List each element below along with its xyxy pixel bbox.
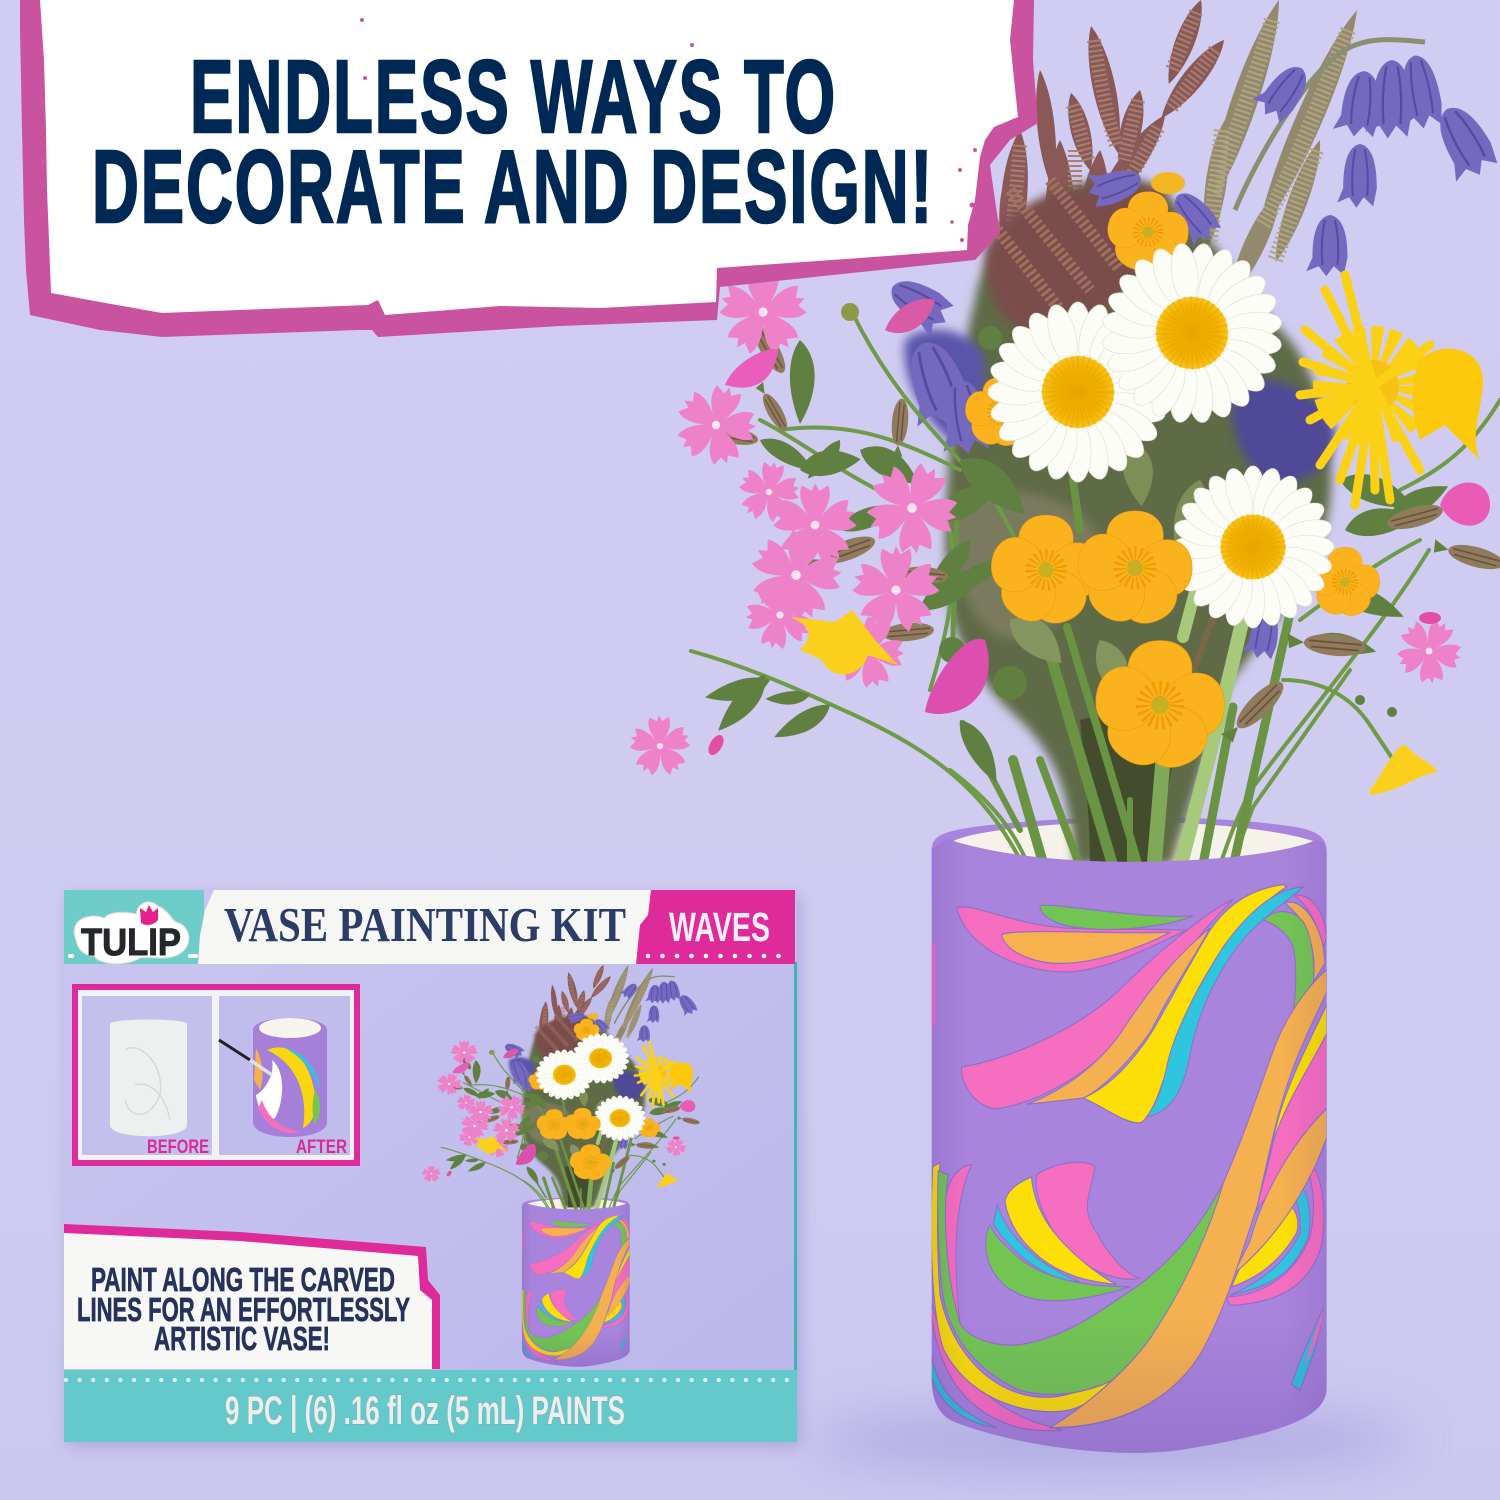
before panel	[82, 996, 212, 1155]
frame inner	[78, 990, 354, 1160]
pack contents label: 9 PC | (6) .16 fl oz (5 mL) PAINTS	[225, 1389, 625, 1433]
top band white torn paper	[198, 890, 651, 964]
banner magenta border	[20, 0, 1038, 337]
white vase	[110, 1020, 187, 1136]
logo cloud	[74, 902, 189, 964]
box face	[64, 890, 797, 1442]
box bouquet image	[419, 964, 700, 1211]
banner: torn paper headline	[20, 0, 1038, 337]
wildflower bouquet	[620, 0, 1500, 880]
callout white paper	[64, 1233, 432, 1369]
headline line 1: ENDLESS WAYS TO	[190, 39, 837, 154]
after label: AFTER	[296, 1137, 347, 1158]
vase back and opening	[932, 817, 1327, 893]
top band magenta	[636, 890, 795, 964]
frame border	[72, 984, 360, 1166]
after panel	[219, 996, 350, 1155]
callout: paint along lines	[64, 1224, 440, 1369]
callout line 1: PAINT ALONG THE CARVED	[91, 1261, 395, 1298]
bottom teal band	[64, 1370, 797, 1442]
band dots	[648, 954, 790, 958]
box right edge	[794, 962, 797, 1442]
product box	[64, 890, 800, 1446]
painted vase	[930, 810, 1330, 1461]
banner white paper	[40, 0, 1018, 315]
kit title: VASE PAINTING KIT	[224, 897, 626, 952]
banner speckles	[360, 18, 977, 242]
logo wordmark: TULIP	[81, 922, 181, 964]
top band teal	[64, 890, 204, 964]
box vase image	[521, 1195, 631, 1369]
left band dots	[70, 954, 196, 958]
logo tulip flower	[140, 905, 158, 925]
callout line 3: ARTISTIC VASE!	[154, 1320, 330, 1357]
painted vase small	[253, 1018, 327, 1137]
callout line 2: LINES FOR AN EFFORTLESSLY	[77, 1291, 410, 1328]
paintbrush	[219, 1040, 272, 1075]
before and after frame	[72, 984, 360, 1166]
callout magenta border	[64, 1224, 440, 1369]
headline line 2: DECORATE AND DESIGN!	[92, 129, 934, 244]
Tulip logo	[74, 902, 189, 964]
bottom band dots	[66, 1378, 795, 1382]
box vase opening	[522, 1197, 630, 1218]
before label: BEFORE	[147, 1137, 209, 1158]
box shadow	[68, 896, 800, 1446]
vase shadow	[810, 1406, 1410, 1474]
variant label: WAVES	[669, 904, 770, 950]
